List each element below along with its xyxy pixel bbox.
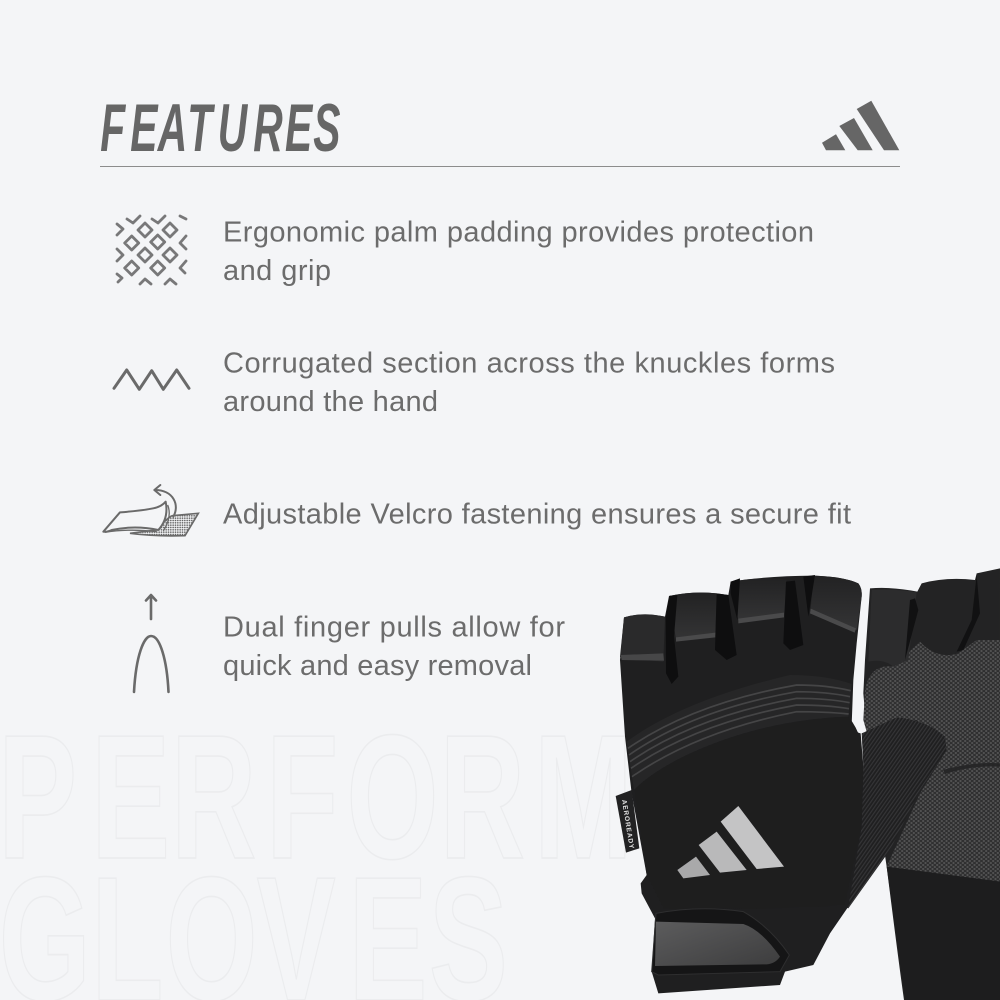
- ghost word: PERFORM: PERFORM: [0, 698, 633, 896]
- tag: AEROREADY: [616, 790, 639, 853]
- feature text: velcro fastening: Adjustable Velcro fastening ensures a secure fit: [223, 498, 851, 530]
- finger slits: [666, 575, 815, 684]
- feature text: corrugated section: [223, 348, 835, 418]
- logo: three bars: [822, 101, 899, 150]
- feature text: finger pulls: [223, 612, 565, 682]
- feature text: palm padding: [223, 216, 814, 287]
- feature text: palm padding: Ergonomic palm padding provides protection: [223, 216, 814, 248]
- finger tops: [620, 576, 862, 662]
- background ghost text: [0, 698, 633, 1000]
- heading: FEATURES: FEATURES: [100, 89, 340, 166]
- heading rule: [100, 166, 900, 167]
- feature text: palm padding: and grip: [223, 255, 331, 287]
- feature text: corrugated section: Corrugated section across the knuckles forms: [223, 348, 835, 380]
- feature text: finger pulls: quick and easy removal: [223, 650, 532, 682]
- icon: velcro peel: [103, 485, 198, 536]
- logo: silver bars: [677, 806, 784, 878]
- glove: left, back of hand: [616, 575, 863, 993]
- feature row: corrugated section: [114, 348, 835, 418]
- wrist strap: [652, 909, 789, 975]
- pull tab: [655, 922, 780, 966]
- tag: AEROREADY: AEROREADY: [620, 799, 635, 850]
- feature row: finger pulls: [134, 595, 565, 692]
- icon: zigzag: [114, 370, 189, 389]
- product photo: pair of gloves: [616, 568, 1000, 1000]
- icon: diamond grid: [117, 216, 186, 284]
- feature row: palm padding: [117, 216, 814, 287]
- feature text: finger pulls: Dual finger pulls allow for: [223, 612, 565, 644]
- glove: right, palm side: [863, 568, 1000, 1000]
- glove: thumb strap: [838, 717, 947, 908]
- corrugated knuckle band: [627, 675, 852, 790]
- feature text: corrugated section: around the hand: [223, 386, 438, 418]
- mesh back panel: [634, 717, 863, 909]
- feature row: velcro fastening: [103, 485, 851, 536]
- icon: finger pull arrow: [134, 595, 168, 692]
